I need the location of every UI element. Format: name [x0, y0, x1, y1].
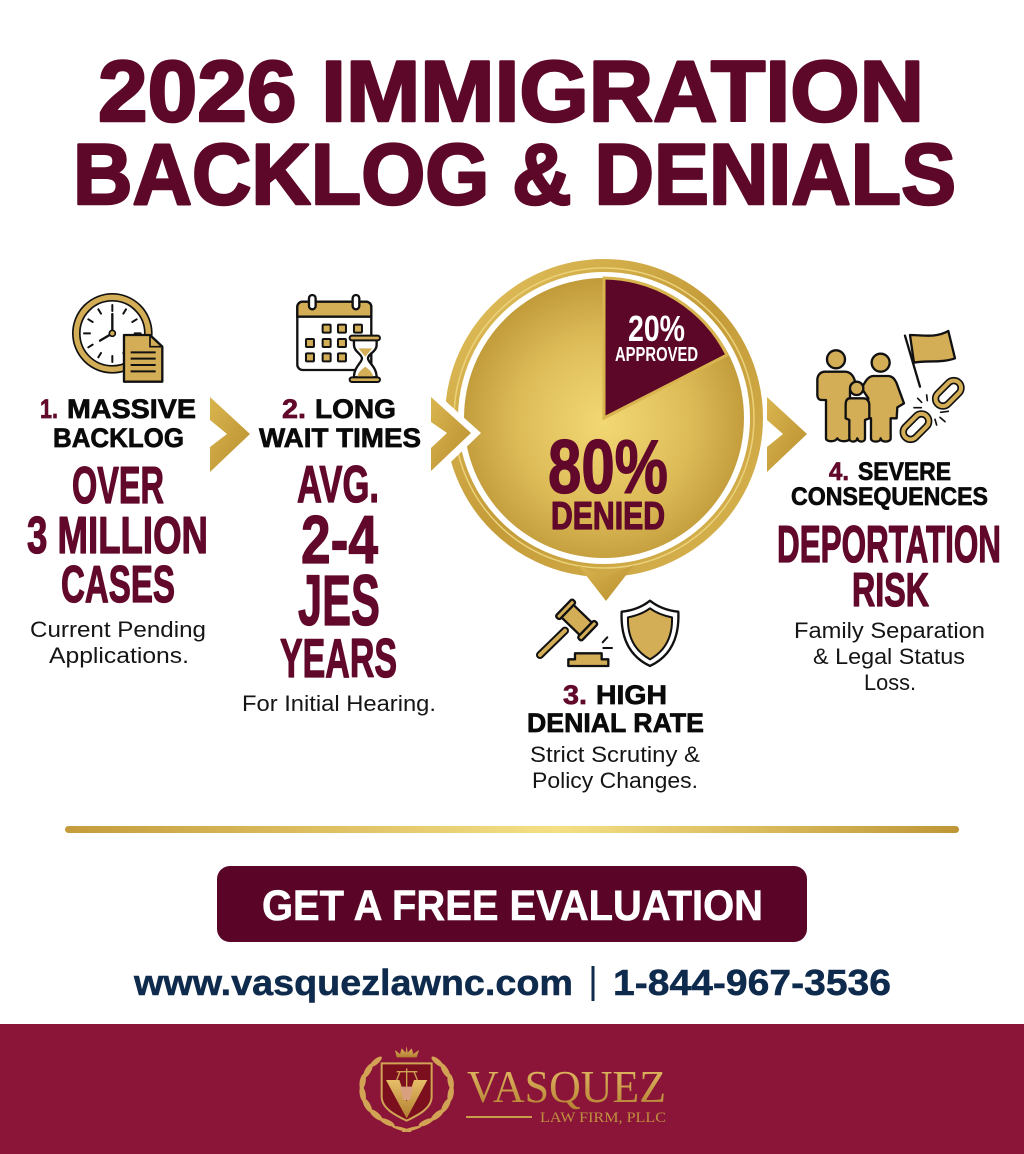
outer gold ring [452, 266, 756, 570]
label: 20% approved: APPROVED [615, 344, 698, 366]
stat: avg 2-4 years: 2-4 [301, 502, 378, 578]
arrow: step 3 to 4 [767, 397, 807, 472]
logo wordmark: VASQUEZ [467, 1062, 666, 1112]
heading: 3. high denial rate: 3. [563, 680, 587, 710]
caption: strict scrutiny and policy changes: Policy Changes. [532, 768, 698, 793]
caption: current pending applications [30, 617, 206, 668]
contact line: 1-844-967-3536 [613, 962, 891, 1003]
caption: family separation and legal status loss [794, 618, 985, 695]
stat: over 3 million cases [27, 457, 208, 614]
contact line [133, 962, 891, 1003]
title: 2026 IMMIGRATION [98, 44, 924, 140]
caption: family separation and legal status loss: & Legal Status [813, 644, 965, 669]
caption: for initial hearing: For Initial Hearing. [242, 691, 436, 716]
heading: 2. long wait times [259, 394, 421, 453]
panel: severe consequences [777, 331, 1001, 695]
heading: 1. massive backlog [40, 394, 196, 453]
label: 80% denied [548, 425, 668, 538]
title: BACKLOG & DENIALS [73, 127, 956, 223]
stat: avg 2-4 years: AVG. [297, 456, 379, 514]
panel: long wait times [242, 295, 436, 716]
stat: deportation risk [777, 516, 1001, 616]
logo wordmark: LAW FIRM, PLLC [540, 1110, 666, 1126]
heading: 3. high denial rate: HIGH [596, 680, 667, 710]
heading: 1. massive backlog: 1. [40, 394, 58, 424]
panel: massive backlog [27, 297, 208, 668]
pie: 80 percent denied [464, 278, 744, 558]
caption: strict scrutiny and policy changes [530, 742, 700, 793]
panel: high denial rate [527, 599, 704, 793]
heading: 2. long wait times: WAIT TIMES [259, 423, 421, 453]
heading: 3. high denial rate: DENIAL RATE [527, 708, 704, 738]
label: 80% denied: DENIED [551, 495, 665, 538]
heading: 4. severe consequences: SEVERE [858, 458, 951, 486]
stat: avg 2-4 years [280, 456, 397, 689]
heading: 2. long wait times: 2. [282, 394, 306, 424]
caption: current pending applications: Current Pending [30, 617, 206, 642]
arrow: pointer down to step 3 [578, 565, 634, 601]
stat: over 3 million cases: OVER [72, 457, 164, 515]
heading: 1. massive backlog: BACKLOG [53, 423, 184, 453]
arrow: step 1 to 2 [210, 397, 250, 472]
chart: denial pie [452, 266, 756, 601]
label: 20% approved [615, 308, 698, 366]
footer band [0, 1024, 1024, 1154]
stat: over 3 million cases: 3 MILLION [27, 507, 208, 565]
stat: avg 2-4 years: JES [298, 562, 380, 641]
heading: 4. severe consequences: CONSEQUENCES [791, 483, 988, 511]
arrow: step 2 to 3 [431, 388, 481, 481]
caption: strict scrutiny and policy changes: Strict Scrutiny & [530, 742, 700, 767]
icon: family, flag and broken chain [817, 331, 964, 442]
heading: 1. massive backlog: MASSIVE [67, 394, 196, 424]
logo emblem [358, 1046, 455, 1133]
caption: family separation and legal status loss: Family Separation [794, 618, 985, 643]
heading: 3. high denial rate [527, 680, 704, 738]
title [73, 44, 956, 223]
label: 80% denied: 80% [548, 425, 668, 510]
call to action button [217, 866, 807, 942]
pie slice: 20 percent approved [604, 278, 727, 418]
stat: avg 2-4 years: YEARS [280, 627, 397, 689]
heading: 4. severe consequences: 4. [829, 458, 849, 486]
caption: current pending applications: Applications. [49, 643, 189, 668]
heading: 2. long wait times: LONG [315, 394, 396, 424]
caption: family separation and legal status loss: Loss. [864, 670, 916, 695]
icon: calendar and hourglass [297, 295, 380, 382]
icon: gavel and shield [540, 599, 678, 666]
heading: 4. severe consequences [791, 458, 988, 511]
icon: clock and document [76, 297, 162, 382]
stat: over 3 million cases: CASES [61, 556, 175, 614]
logo: Vasquez Law Firm [358, 1046, 666, 1133]
contact line: www.vasquezlawnc.com [133, 962, 573, 1003]
label: 20% approved: 20% [628, 308, 685, 349]
call to action button: GET A FREE EVALUATION [262, 882, 763, 930]
stat: deportation risk: RISK [852, 563, 929, 616]
divider rule [65, 826, 959, 833]
